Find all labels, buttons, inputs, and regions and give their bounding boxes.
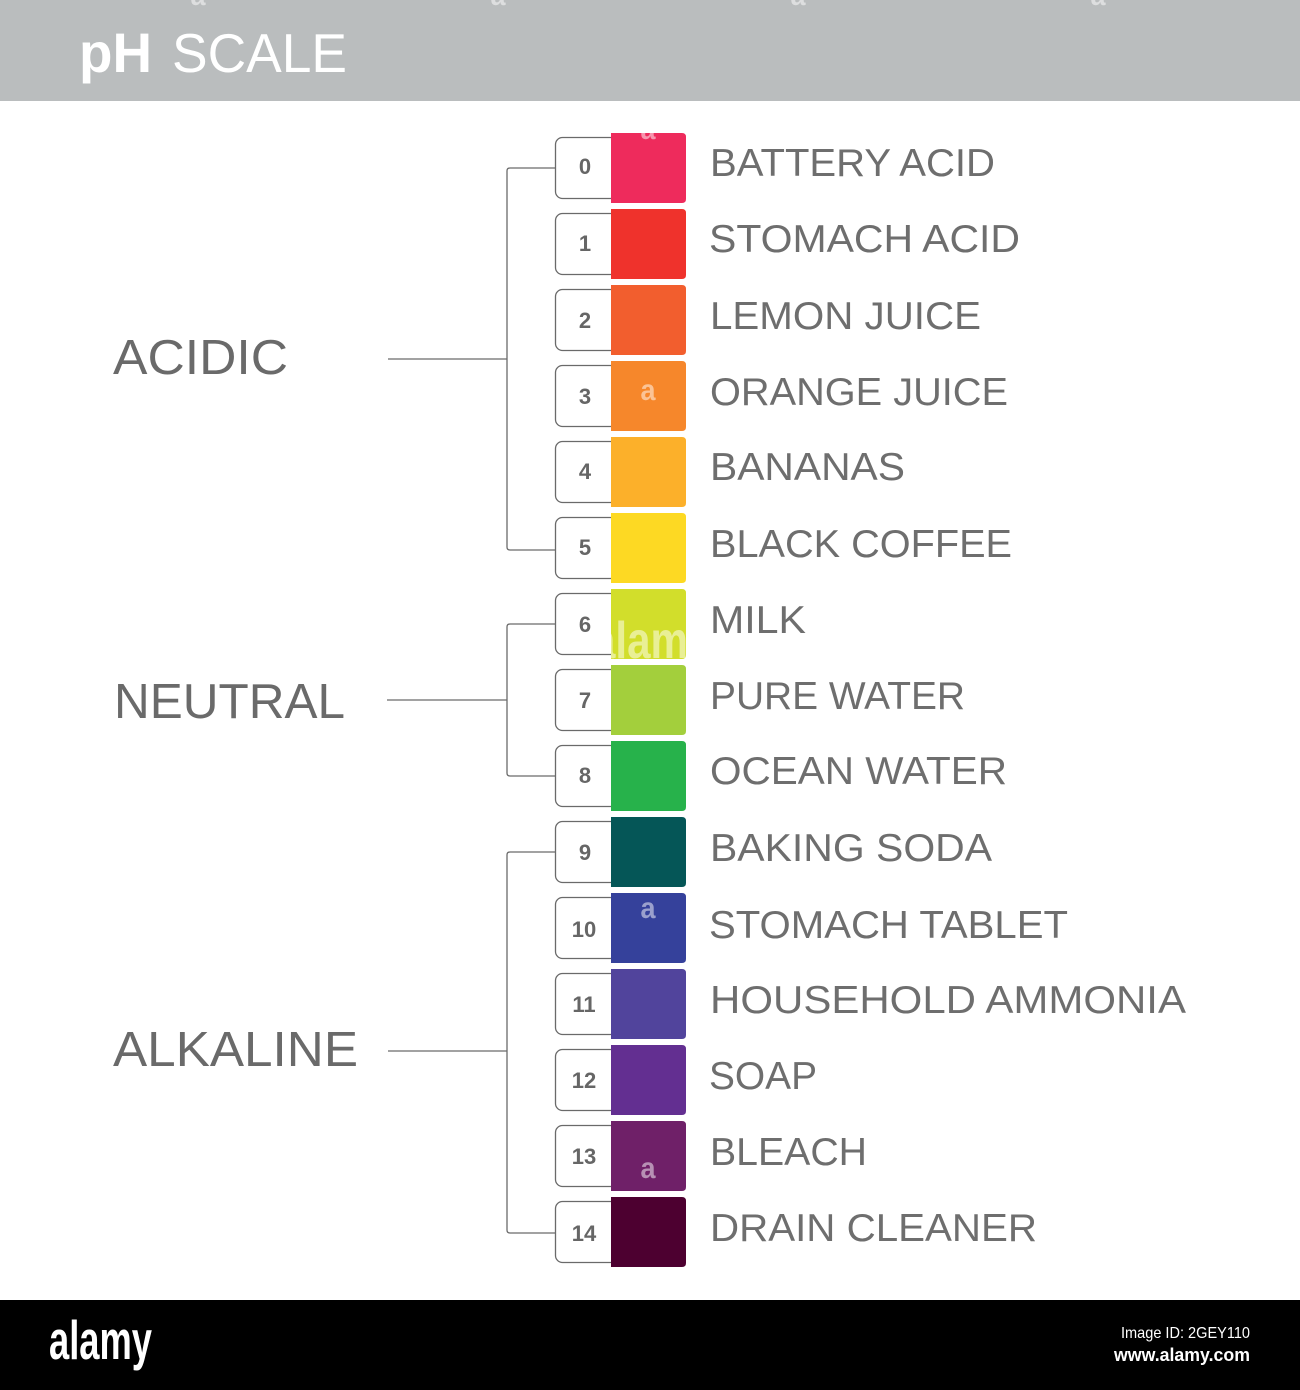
scale row 8: OCEAN WATER [710, 750, 1007, 793]
heading: acidic: ACIDIC [113, 331, 288, 385]
scale row 1: STOMACH ACID [709, 218, 1020, 261]
heading: neutral: NEUTRAL [114, 675, 345, 729]
scale row 13: 13 [572, 1144, 596, 1169]
scale row 3 [556, 361, 1008, 431]
watermark fragments: alam [592, 612, 688, 670]
scale row 5 [556, 513, 1012, 583]
scale row 13: BLEACH [710, 1131, 867, 1174]
bracket: neutral [387, 624, 555, 776]
group: acidic [113, 168, 555, 550]
scale row 14 [556, 1197, 1037, 1267]
scale row 3: ORANGE JUICE [710, 371, 1008, 414]
watermark fragments: a [640, 892, 656, 925]
scale row 9 [556, 817, 992, 887]
watermark fragments: a [640, 374, 656, 407]
bracket: acidic [388, 168, 555, 550]
scale row 14: 14 [572, 1221, 597, 1246]
scale row 6 [556, 589, 806, 659]
footer logo: alamy [49, 1309, 152, 1371]
scale row 0 [556, 133, 995, 203]
scale row 7: PURE WATER [710, 675, 965, 718]
scale row 2: 2 [579, 308, 591, 333]
scale row 10 [556, 893, 1068, 963]
scale row 1: 1 [579, 231, 591, 256]
title: SCALE [172, 22, 347, 84]
scale row 6: MILK [710, 599, 806, 642]
scale row 10: STOMACH TABLET [709, 904, 1068, 947]
scale row 13 [556, 1121, 867, 1191]
footer bar [0, 1300, 1300, 1390]
scale row 5: BLACK COFFEE [710, 523, 1012, 566]
scale row 4: BANANAS [710, 446, 905, 489]
scale row 2 [556, 285, 981, 355]
scale row 9: 9 [579, 840, 591, 865]
scale row 6: 6 [579, 612, 591, 637]
scale row 10: 10 [572, 917, 596, 942]
bracket: alkaline [388, 852, 555, 1233]
watermark fragments [190, 0, 1106, 1185]
scale row 0: 0 [579, 154, 591, 179]
watermark fragments: a [640, 113, 656, 146]
group: alkaline [113, 852, 555, 1233]
scale row 11: 11 [572, 992, 596, 1017]
scale row 14: DRAIN CLEANER [710, 1207, 1037, 1250]
scale row 11: HOUSEHOLD AMMONIA [710, 979, 1186, 1022]
scale row 12: 12 [572, 1068, 596, 1093]
scale row 2: LEMON JUICE [710, 295, 981, 338]
scale row 12: SOAP [709, 1055, 817, 1098]
header banner [0, 0, 1300, 101]
footer url: www.alamy.com [1113, 1345, 1250, 1365]
scale row 7: 7 [579, 688, 591, 713]
scale row 12 [556, 1045, 817, 1115]
scale row 4: 4 [579, 459, 592, 484]
heading: alkaline: ALKALINE [113, 1023, 358, 1077]
footer image id: Image ID: 2GEY110 [1121, 1325, 1250, 1342]
scale row 8: 8 [579, 763, 591, 788]
title [79, 21, 347, 84]
scale row 8 [556, 741, 1007, 811]
scale row 7 [556, 665, 965, 735]
group: neutral [114, 624, 555, 776]
scale row 1 [556, 209, 1020, 279]
title: pH [79, 21, 152, 84]
watermark fragments: a [640, 1152, 656, 1185]
scale row 9: BAKING SODA [710, 827, 992, 870]
scale row 11 [556, 969, 1186, 1039]
scale row 5: 5 [579, 535, 591, 560]
scale row 4 [556, 437, 905, 507]
scale row 0: BATTERY ACID [710, 142, 995, 185]
scale row 3: 3 [579, 384, 591, 409]
